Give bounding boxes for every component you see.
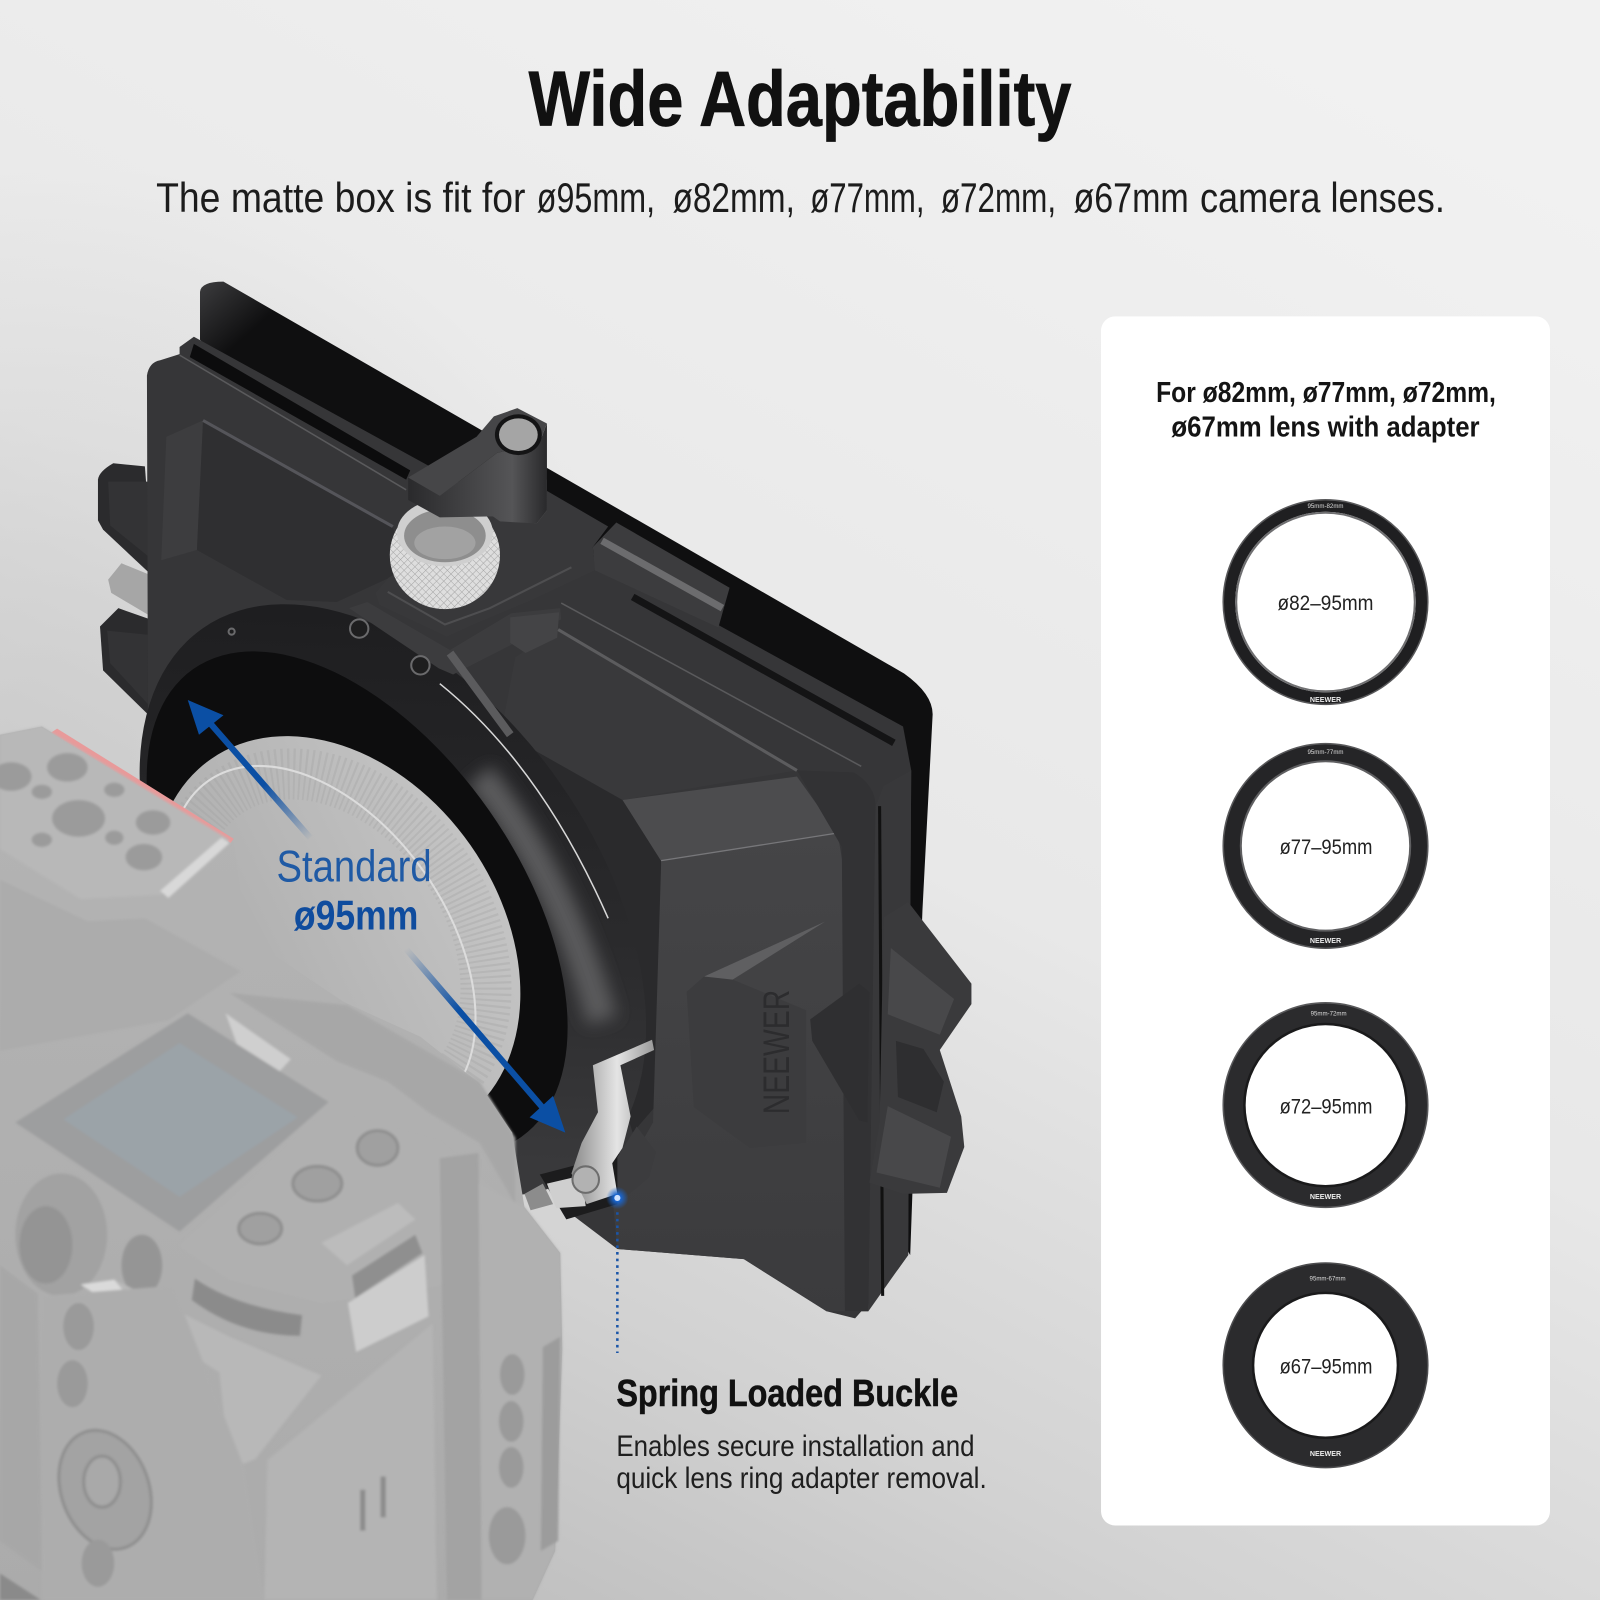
- grip: [479, 1184, 562, 1600]
- panel: adapter rings: [1101, 316, 1550, 1526]
- arrow: bottom diameter: [406, 949, 565, 1133]
- adapter ring 82-95mm: 95mm-82mm: [1308, 503, 1344, 510]
- body under plate: [0, 880, 241, 1051]
- subtitle: ø72mm,: [941, 174, 1056, 221]
- vertical band: [440, 1153, 482, 1600]
- panel heading: ø67mm lens with adapter: [1171, 412, 1480, 444]
- diameter label: [277, 841, 432, 939]
- left strip: [0, 1265, 42, 1571]
- logo bracket: [810, 984, 869, 1122]
- top plate: [0, 727, 230, 899]
- front face C: [612, 834, 868, 1311]
- dial: [15, 1173, 107, 1296]
- camera overlay: [0, 727, 562, 1600]
- subtitle: camera lenses.: [1200, 174, 1445, 221]
- subtitle: ø95mm,: [537, 174, 655, 221]
- title: Wide Adaptability: [529, 57, 1071, 143]
- red rim light: [51, 729, 234, 843]
- panel heading: [1156, 377, 1496, 444]
- hood shoulder: [510, 735, 661, 1133]
- adapter ring 82-95mm: NEEWER: [1310, 696, 1341, 704]
- clamp lower arm: [349, 602, 561, 674]
- hood chamfer B: [622, 777, 838, 861]
- embossed logo: NEEWER: [756, 990, 797, 1114]
- subtitle: ø82mm,: [672, 174, 795, 221]
- hood face A: [504, 630, 797, 800]
- arrow: top diameter: [188, 700, 310, 838]
- port: [352, 1235, 422, 1298]
- inset hood panel: [197, 420, 403, 602]
- product illustration: matte box: [35, 282, 971, 1318]
- adapter ring 67-95mm: ø67–95mm: [1280, 1354, 1372, 1378]
- textured band: [82, 1280, 321, 1469]
- subtitle: ø67mm: [1073, 174, 1189, 221]
- deck buttons: [239, 1131, 398, 1244]
- diameter label: Standard: [277, 841, 432, 892]
- right side tabs: [869, 902, 971, 1194]
- subtitle: ø77mm,: [810, 174, 924, 221]
- plate holes: [0, 753, 170, 870]
- marks: [360, 1477, 386, 1531]
- lens ring adapter: [35, 511, 750, 1289]
- corner shadow: [0, 1573, 41, 1600]
- callout dot and dotted leader: [606, 1187, 629, 1353]
- spring loaded buckle: [524, 1040, 656, 1219]
- central mid panel: [42, 1286, 264, 1600]
- left side tabs: [98, 463, 153, 719]
- viewfinder slot: [321, 1203, 415, 1265]
- adapter ring 72-95mm: [1223, 1003, 1428, 1207]
- knurled screw: [108, 563, 149, 615]
- right frame: [868, 770, 911, 1311]
- slot: [541, 1337, 560, 1551]
- adapter ring 72-95mm: ø72–95mm: [1280, 1094, 1372, 1118]
- adapter ring 72-95mm: 95mm-72mm: [1311, 1010, 1347, 1017]
- silver knurled knob: [390, 501, 500, 609]
- adapter ring 82-95mm: [1223, 500, 1428, 704]
- screen housing: [15, 1013, 329, 1232]
- rail groove and lines: [190, 344, 410, 480]
- panel heading: For ø82mm, ø77mm, ø72mm,: [1156, 377, 1496, 409]
- callout: spring loaded buckle: Spring Loaded Buckle: [616, 1372, 958, 1414]
- camera body silhouette: [0, 727, 562, 1600]
- adapter ring 77-95mm: ø77–95mm: [1280, 835, 1372, 859]
- callout: spring loaded buckle: quick lens ring adapter removal.: [616, 1462, 987, 1495]
- screen: [63, 1043, 298, 1197]
- adapter ring 77-95mm: [1223, 744, 1428, 948]
- callout: spring loaded buckle: [616, 1372, 987, 1495]
- d-pad: [43, 1417, 167, 1562]
- left facet: [161, 420, 203, 560]
- back flag plate: [200, 282, 933, 1255]
- control deck: [180, 1112, 520, 1303]
- light patch: [226, 1013, 291, 1071]
- hood base: [147, 337, 911, 1318]
- side buttons: [57, 1303, 526, 1587]
- lower right panel: [264, 1323, 437, 1600]
- locking lever handle: [493, 480, 547, 523]
- button beside dial: [121, 1235, 162, 1296]
- subtitle: The matte box is fit for: [156, 174, 526, 221]
- callout: spring loaded buckle: Enables secure installation and: [616, 1430, 974, 1463]
- adapter ring 82-95mm: ø82–95mm: [1278, 591, 1373, 615]
- rail cylinder: [593, 522, 730, 628]
- cage arm: [230, 993, 515, 1204]
- side facet: [687, 921, 826, 1148]
- adapter ring 67-95mm: 95mm-67mm: [1310, 1276, 1346, 1283]
- dial wheel: [192, 1279, 302, 1336]
- adapter ring 77-95mm: NEEWER: [1310, 937, 1341, 945]
- clamp base: [376, 491, 608, 637]
- diameter label: ø95mm: [294, 892, 418, 939]
- adapter ring 67-95mm: [1223, 1263, 1428, 1467]
- lens: [77, 665, 596, 1212]
- adapter ring 72-95mm: NEEWER: [1310, 1193, 1341, 1201]
- right band: [797, 770, 876, 1311]
- mounting screws: [229, 619, 430, 674]
- adapter ring 67-95mm: NEEWER: [1310, 1450, 1341, 1458]
- white triangle: [81, 1280, 122, 1305]
- adapter ring 77-95mm: 95mm-77mm: [1308, 749, 1344, 756]
- subtitle: [156, 174, 1445, 221]
